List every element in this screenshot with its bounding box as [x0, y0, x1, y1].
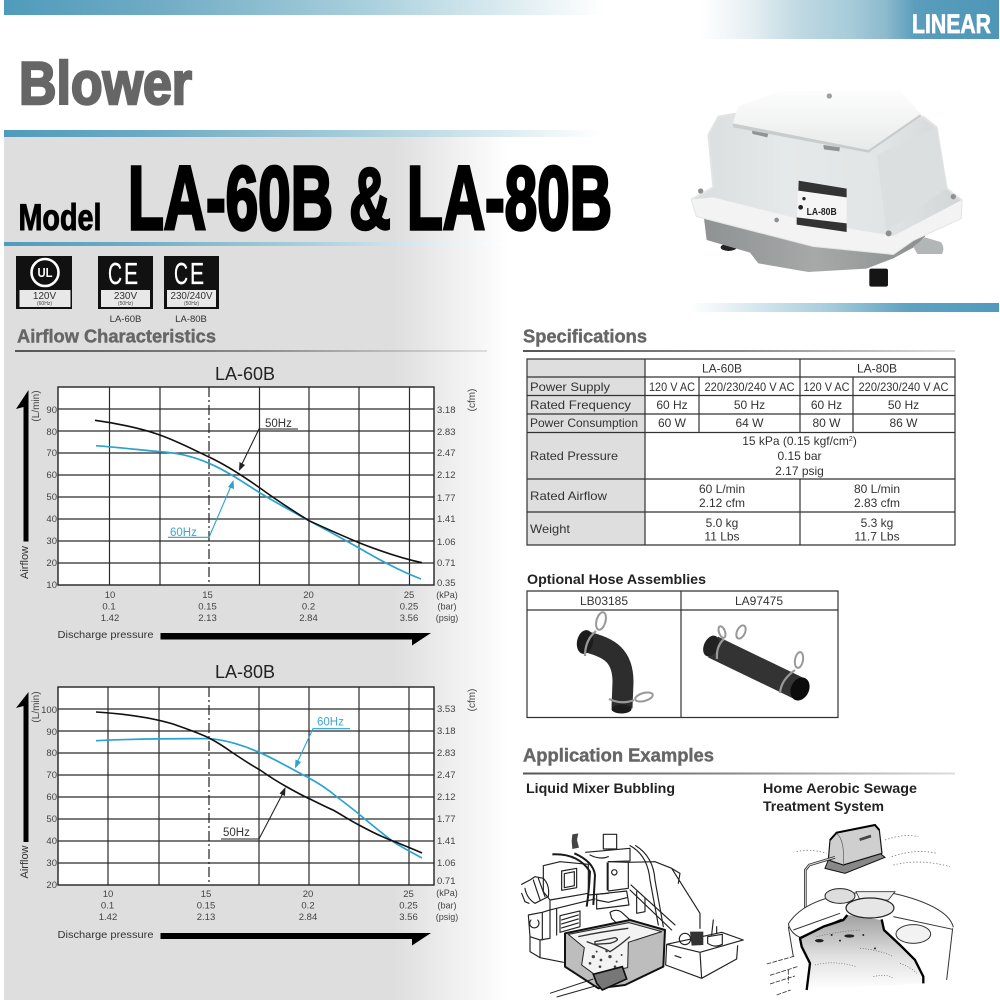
certification: CE 230/240V: C [174, 256, 188, 291]
right axis ticks: 1.77 [437, 814, 456, 825]
left axis ticks: 30 [46, 858, 57, 869]
icon: rear foot [721, 244, 737, 251]
model heading: LA-80B [407, 149, 612, 249]
row labels: Power Consumption [530, 416, 638, 430]
axis units: (bar) [437, 900, 457, 910]
bubbles [589, 950, 623, 968]
certification: CE 230V: E [124, 256, 138, 291]
right axis ticks: 1.06 [437, 858, 456, 869]
row labels: Rated Pressure [530, 449, 618, 463]
sludge specks [815, 934, 876, 949]
row labels: Rated Frequency [530, 398, 631, 412]
table values: 2.83 cfm [854, 496, 900, 510]
label plate [797, 180, 847, 232]
certification: CE 230/240V: E [190, 256, 204, 291]
white housing [692, 114, 962, 254]
right axis ticks: 2.47 [437, 448, 456, 459]
right axis ticks: 1.77 [437, 493, 456, 504]
axis title: L/min: (L/min) [31, 390, 42, 422]
right axis ticks: 1.41 [437, 836, 456, 847]
bottom axis ticks: 0.1 [102, 602, 116, 612]
table values: 2 [849, 436, 853, 443]
bottom axis ticks: 2.84 [299, 613, 318, 624]
liquid surface [578, 928, 630, 952]
right axis ticks: 0.35 [437, 578, 456, 589]
axis title: cfm: (cfm) [467, 389, 478, 411]
certification: CE 230/240V: 230/240V [170, 291, 213, 302]
right axis ticks: 3.53 [437, 704, 456, 715]
left axis ticks: 70 [46, 770, 57, 781]
hose LB03185 [575, 611, 654, 714]
subheading: Home Aerobic Sewage Treatment System: Treatment System [763, 798, 884, 814]
table values: LA-60B [702, 362, 742, 376]
left axis ticks: 90 [46, 405, 57, 416]
left axis ticks: 50 [46, 814, 57, 825]
callout: 50Hz: 50Hz [223, 827, 250, 839]
model heading: & [349, 149, 391, 248]
bottom axis ticks: 10 [105, 590, 115, 601]
third blue band [4, 242, 508, 246]
table values: 120 V AC [649, 380, 695, 394]
left axis ticks: 100 [41, 705, 57, 716]
axis units: (kPa) [436, 888, 458, 898]
heading: Application Examples: Application Examples [523, 746, 714, 766]
chart: LA-80B airflow [16, 662, 478, 946]
table values: 60 Hz [811, 398, 842, 412]
callout: 50Hz: 50Hz [265, 418, 292, 430]
bottom axis ticks: 15 [202, 590, 213, 601]
curve: 50Hz [95, 420, 422, 563]
bottom axis ticks: 25 [403, 889, 414, 900]
cutaway [800, 915, 923, 990]
table values: 11 Lbs [704, 530, 740, 544]
plot frame [58, 687, 434, 885]
certification: CE 230V: C [108, 256, 122, 291]
chart: LA-60B airflow [16, 364, 478, 646]
left axis ticks: 80 [46, 427, 57, 438]
table values: 220/230/240 V AC [704, 380, 795, 394]
bottom axis ticks: 0.2 [302, 602, 315, 612]
right axis ticks [437, 704, 456, 887]
certification: UL 120V [16, 256, 72, 309]
bottom axis ticks: 15 [201, 889, 211, 900]
subheading: Liquid Mixer Bubbling: Liquid Mixer Bubbling [526, 780, 675, 796]
callout: 50Hz [239, 418, 298, 471]
certification: UL 120V: (60Hz) [37, 301, 52, 307]
hose table [527, 591, 838, 718]
row labels: Weight [530, 522, 571, 536]
table values: 86 W [889, 416, 918, 430]
row labels [530, 380, 638, 536]
bottom axis ticks: 20 [303, 889, 313, 900]
right axis ticks: 2.47 [437, 770, 456, 781]
table values: LA-80B [857, 362, 897, 376]
machine outline [522, 834, 743, 978]
heading: Airflow Characteristics: Airflow Characteristics [17, 326, 216, 346]
specifications table [527, 359, 955, 545]
table values: 220/230/240 V AC [858, 380, 949, 394]
bottom axis ticks: 25 [404, 590, 414, 601]
certification: CE 230V: (50Hz) [118, 301, 133, 307]
right axis ticks: 2.83 [437, 427, 456, 438]
certification: CE 230V [98, 256, 153, 309]
callout: 60Hz [295, 716, 350, 768]
arrow: airflow [16, 390, 28, 542]
table values: 80 L/min [854, 482, 900, 496]
housing lower lip [692, 197, 962, 254]
arrow: discharge pressure [160, 633, 431, 646]
certification: UL 120V: 120V [33, 291, 57, 302]
bottom axis ticks: 3.56 [400, 613, 418, 624]
LINEAR tab [700, 0, 999, 39]
label column shading [527, 359, 645, 545]
table values: 64 W [735, 416, 764, 430]
label plate: LA-80B [807, 207, 837, 218]
bottom axis ticks: 10 [103, 889, 113, 900]
illustration: sewage treatment [767, 825, 953, 995]
bottom axis ticks: 2.13 [197, 912, 215, 923]
air outlet [913, 237, 943, 254]
motor [690, 932, 703, 946]
lid edge [733, 114, 921, 153]
right axis ticks: 1.41 [437, 514, 456, 525]
subheading: Home Aerobic Sewage Treatment System [763, 780, 917, 814]
row labels: Power Supply [530, 380, 610, 394]
bottom axis ticks: 2.13 [198, 613, 217, 624]
right axis ticks: 2.12 [437, 792, 456, 803]
model heading: LA-60B [128, 149, 333, 249]
left axis ticks: 20 [46, 880, 57, 891]
callout: 60Hz: 60Hz [317, 716, 344, 728]
callout: 60Hz [168, 480, 234, 539]
front foot [869, 269, 888, 287]
table values: ) [853, 434, 857, 448]
side face shade [877, 127, 947, 232]
tank lid right [896, 925, 931, 943]
inlet pipes [767, 956, 797, 995]
bottom axis ticks: 1.42 [101, 613, 119, 624]
heading: Optional Hose Assemblies: Optional Hose Assemblies [527, 572, 706, 587]
plot frame [58, 387, 434, 585]
table values: 2.12 cfm [699, 496, 745, 510]
right axis ticks [437, 405, 456, 589]
axis title: L/min: (L/min) [31, 691, 42, 723]
axis label: Airflow: Airflow [19, 845, 31, 879]
label: LA-60B: LA-60B [110, 314, 141, 325]
left axis ticks [46, 405, 57, 591]
axis units: (kPa) [436, 590, 458, 600]
table values: 15 kPa (0.15 kgf/cm [742, 434, 849, 448]
arrow: discharge pressure [160, 933, 431, 946]
model heading [18, 149, 612, 249]
left axis ticks: 60 [46, 470, 57, 481]
callout: 50Hz [221, 787, 286, 839]
tank lid small [825, 889, 855, 903]
blower unit [825, 825, 885, 873]
certification: CE 230V: 230V [114, 291, 138, 302]
certification: UL 120V: UL [38, 265, 53, 280]
bottom axis ticks: 20 [303, 590, 314, 601]
left axis ticks [41, 705, 57, 891]
table values: 11.7 Lbs [854, 530, 900, 544]
bottom axis ticks: 0.2 [301, 900, 315, 912]
axis title: cfm: (cfm) [467, 689, 478, 711]
certification: CE 230/240V: (50Hz) [184, 301, 199, 307]
tank opening [568, 923, 662, 974]
right axis ticks: 2.83 [437, 748, 456, 759]
axis label: Discharge pressure: Discharge pressure [58, 929, 154, 941]
air pipe [593, 967, 627, 990]
axis units: (bar) [437, 602, 457, 612]
bottom axis ticks: 3.56 [399, 912, 418, 923]
chart title: LA-80B [215, 662, 275, 682]
tank [565, 920, 665, 988]
axis units [436, 590, 458, 623]
chart title: LA-60B [215, 364, 275, 384]
bottom axis ticks: 0.25 [400, 602, 418, 612]
left axis ticks: 90 [46, 727, 57, 738]
subheading: Home Aerobic Sewage Treatment System: Home Aerobic Sewage [763, 780, 917, 796]
right axis ticks: 0.71 [437, 876, 456, 887]
bottom axis ticks: 0.15 [198, 602, 217, 612]
dark hoses [552, 853, 608, 907]
label: LA-80B: LA-80B [175, 314, 207, 325]
table values: 120 V AC [804, 380, 850, 394]
tank lid main [846, 898, 894, 918]
bottom axis ticks: 0.15 [197, 900, 215, 912]
right axis ticks: 0.71 [437, 558, 456, 569]
right axis ticks: 3.18 [437, 405, 456, 416]
hatch [856, 892, 895, 900]
left axis ticks: 60 [46, 792, 57, 803]
right axis ticks: 1.06 [437, 537, 456, 548]
axis label: Discharge pressure: Discharge pressure [58, 629, 154, 641]
left axis ticks: 10 [46, 580, 57, 591]
table values: 0.15 bar [777, 449, 822, 463]
bottom axis ticks: 2.84 [299, 912, 317, 923]
curve: 60Hz [96, 446, 421, 579]
bottom axis ticks: 0.25 [399, 900, 418, 912]
bottom axis ticks: 1.42 [99, 912, 117, 923]
bottom axis ticks: 0.1 [101, 900, 114, 912]
axis units: (psig) [436, 613, 458, 623]
screws [698, 188, 956, 236]
table values: 50 Hz [888, 398, 919, 412]
table values: 60 Hz [656, 398, 688, 412]
top blue band [4, 0, 604, 15]
right axis ticks: 3.18 [437, 726, 456, 737]
table values: 50 Hz [734, 398, 765, 412]
curve: 60Hz [96, 739, 422, 858]
hose table: LB03185 [580, 594, 628, 608]
second blue band [4, 130, 602, 137]
grey background panel [4, 137, 510, 1000]
axis units: (psig) [436, 912, 458, 922]
air pipe [805, 857, 835, 918]
pump base [704, 218, 927, 272]
curve: 50Hz [96, 712, 422, 853]
tank dome [788, 893, 953, 993]
table values: 80 W [812, 416, 841, 430]
callout: 60Hz: 60Hz [170, 527, 197, 539]
left axis ticks: 40 [46, 836, 57, 847]
right axis ticks: 2.12 [437, 470, 456, 481]
shrubs [797, 836, 950, 867]
hose table: LA97475 [735, 594, 783, 608]
blue band under product [690, 303, 999, 312]
left axis ticks: 50 [46, 492, 57, 503]
axis label: Airflow: Airflow [19, 546, 31, 579]
left axis ticks: 30 [46, 536, 57, 547]
lid nubs [752, 130, 840, 151]
table values: 60 W [658, 416, 687, 430]
table values: 60 L/min [699, 482, 745, 496]
heading: Specifications: Specifications [523, 326, 647, 346]
axis units [436, 888, 458, 922]
certification: CE 230/240V [164, 256, 219, 309]
left axis ticks: 80 [46, 748, 57, 759]
row labels: Rated Airflow [530, 489, 607, 503]
table values: 2.17 psig [775, 464, 824, 478]
bottom axis ticks [99, 889, 418, 923]
illustration: liquid mixer [522, 833, 743, 997]
hose LA97475 [700, 624, 813, 704]
table values [649, 362, 949, 544]
left axis ticks: 70 [46, 448, 57, 459]
title: Blower: Blower [19, 50, 192, 117]
product photo: LA-80B blower [692, 90, 962, 287]
lid screw [827, 93, 832, 99]
valve [572, 833, 579, 849]
crack edges [800, 915, 923, 990]
table values: 5.0 kg [706, 516, 738, 530]
model heading: Model [18, 197, 102, 238]
arrow: airflow [16, 692, 28, 842]
left axis ticks: 40 [46, 514, 57, 525]
left axis ticks: 20 [46, 558, 57, 569]
table values: 5.3 kg [861, 516, 893, 530]
lid [733, 90, 921, 151]
bottom axis ticks [101, 590, 418, 624]
